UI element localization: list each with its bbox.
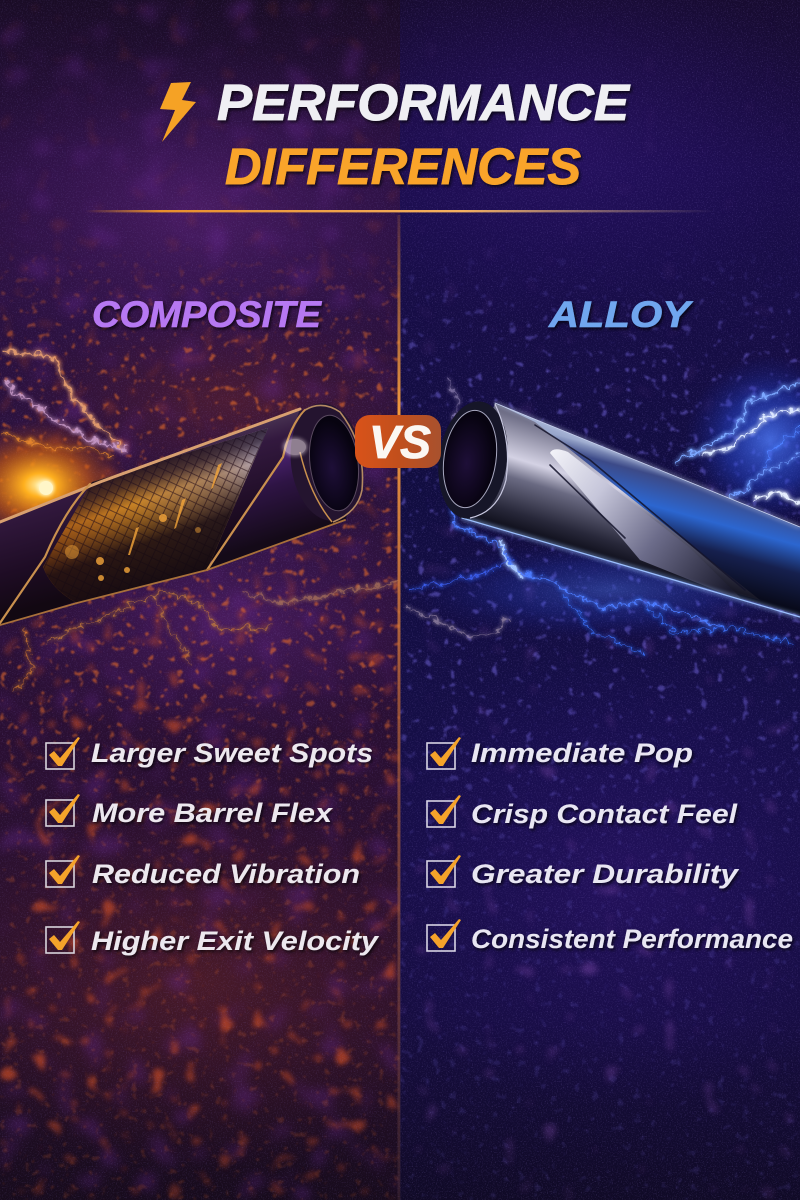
item: immediate pop [427,737,693,769]
list: composite benefits [46,737,380,956]
heading: alloy: ALLOY [548,294,694,335]
item: higher exit velocity [46,921,380,956]
cap section [207,409,362,570]
item: reduced vibration: Reduced Vibration [92,859,360,889]
title [217,74,631,195]
panel: alloy background [400,0,800,1200]
item: immediate pop: Immediate Pop [471,738,693,768]
silver highlight stripe [550,449,745,602]
item: crisp contact feel: Crisp Contact Feel [471,799,738,829]
bat body [0,409,345,625]
item: reduced vibration [46,855,360,889]
list: alloy benefits [427,737,793,954]
item: more barrel flex: More Barrel Flex [92,798,333,828]
item: greater durability [427,855,740,889]
carbon weave window [43,428,268,603]
title: PERFORMANCE [217,74,631,131]
dark grooves [535,425,745,590]
bat: composite [0,399,370,625]
item: more barrel flex [46,794,333,828]
icon: lightning bolt [160,82,196,142]
lightning: alloy energy [405,355,800,650]
title divider [85,210,715,212]
VS badge: VS [369,416,431,468]
bat opening [284,399,370,525]
title: DIFFERENCES [225,138,581,195]
silver section [460,403,760,600]
heading: composite: COMPOSITE [92,294,322,335]
bat: alloy [431,397,800,617]
gold trim [0,409,345,625]
edge glow [462,403,800,617]
lightning: composite energy [0,347,395,690]
item: higher exit velocity: Higher Exit Velocity [91,926,380,956]
bat body [460,403,800,615]
vertical divider [398,215,400,1200]
panel: composite background [0,0,400,1200]
item: larger sweet spots: Larger Sweet Spots [91,738,373,768]
bat opening [431,397,515,523]
item: consistent performance: Consistent Performance [471,924,793,954]
item: crisp contact feel [427,795,738,829]
item: greater durability: Greater Durability [471,859,740,889]
